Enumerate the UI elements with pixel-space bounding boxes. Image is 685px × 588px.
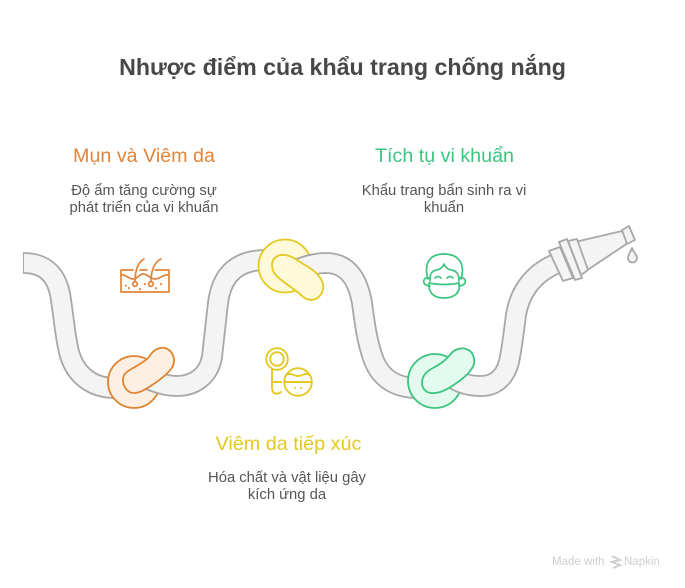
hose with knots	[23, 240, 558, 408]
hose segment 1	[23, 263, 115, 388]
yellow knot capsule	[272, 255, 323, 300]
watermark	[552, 556, 660, 568]
icon: cosmetic mirror and face	[266, 348, 312, 396]
text block: Tích tụ vi khuẩn: Khẩu trang bẩn sinh ra vi	[362, 183, 526, 199]
icon: mask face	[424, 254, 465, 298]
text block: Viêm da tiếp xúc: kích ứng da	[248, 487, 327, 503]
orange knot ring	[108, 356, 160, 408]
yellow knot ring	[258, 240, 312, 292]
nozzle	[549, 226, 637, 281]
text block: Viêm da tiếp xúc	[208, 433, 367, 503]
text block: Viêm da tiếp xúc: Hóa chất và vật liệu gây	[208, 470, 367, 486]
hose segment 3	[294, 263, 418, 388]
watermark: Made with	[552, 556, 604, 568]
text block: Mụn và Viêm da	[70, 145, 218, 216]
text block: Mụn và Viêm da: Độ ẩm tăng cường sự	[71, 183, 217, 199]
hose segment 4	[450, 263, 558, 386]
green knot ring	[408, 354, 462, 408]
text block: Viêm da tiếp xúc: Viêm da tiếp xúc	[216, 433, 362, 455]
text block: Mụn và Viêm da: phát triển của vi khuẩn	[70, 200, 218, 216]
green knot capsule	[422, 348, 474, 393]
water drop	[628, 248, 637, 262]
orange knot capsule	[123, 348, 174, 393]
icon: skin with hair	[121, 259, 169, 292]
text block: Tích tụ vi khuẩn: Tích tụ vi khuẩn	[375, 145, 514, 167]
hose segment 2	[148, 260, 266, 386]
title: Nhược điểm của khẩu trang chống nắng	[119, 53, 566, 80]
text block: Tích tụ vi khuẩn: khuẩn	[424, 200, 464, 216]
text block: Mụn và Viêm da: Mụn và Viêm da	[73, 145, 215, 167]
text block: Tích tụ vi khuẩn	[362, 145, 526, 216]
icon: Napkin logo	[612, 556, 620, 568]
watermark: Napkin	[624, 556, 660, 568]
